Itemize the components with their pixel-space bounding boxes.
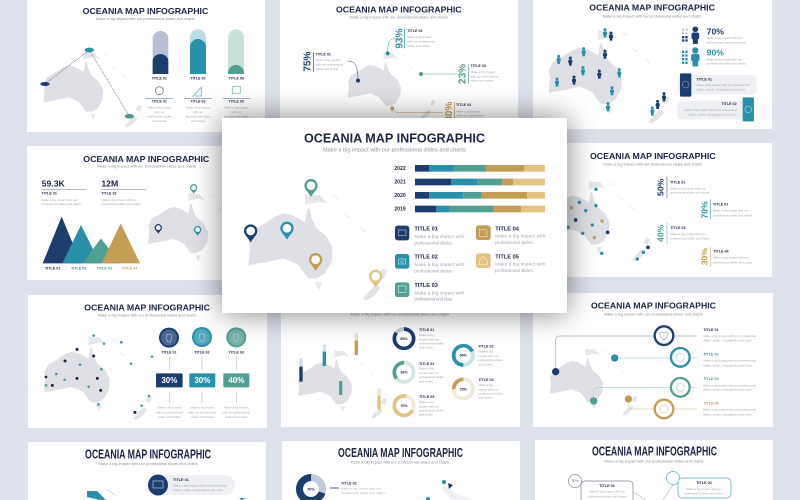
panel: top middle slide: TITLE 01 <box>316 52 331 56</box>
panel: top left slide <box>27 0 265 132</box>
panel: lower right slide <box>533 293 773 427</box>
panel: bottom middle slide: professional slides and charts <box>341 491 386 495</box>
panel: lower middle slide: 85% <box>400 337 408 341</box>
panel: lower right slide: OCEANIA MAP INFOGRAPHIC <box>591 301 717 311</box>
panel: top right slide: Make a big impact with our professional slides and charts <box>603 14 701 18</box>
stacked bar chart <box>394 165 545 213</box>
legend item: title 02: Make a big impact with <box>414 262 465 267</box>
panel: top left slide: TITLE 03 <box>229 77 244 81</box>
panel: middle left slide: 12M <box>101 179 118 189</box>
panel: lower left slide: 30% <box>194 376 210 385</box>
panel: lower left slide: with our professional <box>156 410 183 414</box>
panel: middle left slide: Make a big impact with our professional slides and charts <box>97 165 196 169</box>
panel: top left slide: professional slides <box>186 115 211 119</box>
panel: lower middle slide: Make a big <box>478 350 493 354</box>
legend item: title 04: TITLE 04 <box>495 226 520 232</box>
panel: top left slide: with our <box>231 110 242 114</box>
panel: lower left slide: Make a big impact <box>157 406 182 410</box>
panel: lower middle slide: and charts <box>419 379 433 383</box>
panel: lower middle slide: and charts <box>419 346 433 350</box>
panel: lower middle slide: impact with our <box>419 371 439 375</box>
panel: top middle slide: TITLE 02 <box>407 29 423 33</box>
panel: middle left slide: TITLE 03 <box>97 266 112 270</box>
panel: middle right slide: 30% <box>700 248 710 265</box>
subtitle: Make a big impact with our professional slides and charts <box>323 147 466 153</box>
panel: bottom middle slide: Make a big impact with our <box>341 486 381 490</box>
panel: top left slide: and charts <box>152 119 167 123</box>
panel: top right slide <box>533 0 772 129</box>
panel: top right slide: slides, charts, infographics and more <box>688 113 737 117</box>
panel: top middle slide: OCEANIA MAP INFOGRAPHIC <box>336 5 462 15</box>
panel: lower left slide: OCEANIA MAP INFOGRAPHIC <box>84 302 211 312</box>
panel: lower middle slide: professional slides <box>478 358 503 362</box>
panel: lower left slide: Make a big impact with our professional slides and charts <box>98 313 196 317</box>
stacked bar chart: 2020 <box>394 193 406 199</box>
panel: middle right slide: professional slides and charts <box>713 260 753 264</box>
panel: top middle slide: slides and charts <box>407 44 430 48</box>
panel: top middle slide: 23% <box>458 64 469 84</box>
panel: middle right slide: Make a big impact with our <box>713 209 748 213</box>
panel: lower left slide: TITLE 01 <box>161 350 177 354</box>
panel: lower middle slide: TITLE 03 <box>419 362 434 366</box>
panel: lower middle slide: professional slides <box>419 375 444 379</box>
panel: bottom left slide <box>28 442 266 500</box>
panel: lower right slide: Make a big impact with our professional slides and charts <box>604 312 703 316</box>
panel: lower left slide: TITLE 03 <box>229 350 244 354</box>
panel: lower right slide: slides, charts, infographics and more <box>703 363 752 367</box>
legend item: title 03 <box>395 282 465 302</box>
panel: middle left slide: TITLE 02 <box>101 191 117 195</box>
panel: top left slide: Make a big impact <box>186 106 210 110</box>
panel: top right slide: TITLE 01 <box>697 77 712 81</box>
panel: middle left slide <box>27 146 265 280</box>
panel: middle left slide: professional slides and charts <box>101 202 141 206</box>
legend item: title 02: TITLE 02 <box>414 255 438 261</box>
panel: lower left slide: Make a big impact <box>190 406 215 410</box>
legend item: title 02: professional slides. <box>414 268 453 273</box>
panel: top middle slide: TITLE 04 <box>456 103 472 107</box>
panel: top left slide: Make a big impact with our professional slides and charts <box>96 17 195 21</box>
panel: top middle slide: with our professional <box>316 62 343 66</box>
panel: top left slide: TITLE 02 <box>190 77 206 81</box>
panel: middle right slide: TITLE 01 <box>670 180 685 184</box>
panel: middle right slide: professional slides and charts <box>670 237 710 241</box>
panel: top right slide: Make a big impact with our professional <box>684 108 737 112</box>
panel: middle left slide: TITLE 04 <box>122 266 138 270</box>
panel: middle right slide <box>500 143 772 277</box>
panel: lower right slide: Make a big impact with our professional <box>703 383 756 387</box>
panel: top left slide: with our <box>193 110 203 114</box>
panel: top left slide: TITLE 01 <box>152 99 167 103</box>
panel: lower left slide: slides and charts <box>158 415 181 419</box>
panel: top left slide: and charts <box>191 119 205 123</box>
panel: lower left slide <box>28 295 267 428</box>
panel: middle left slide: TITLE 02 <box>71 266 86 270</box>
panel: middle right slide: professional slides and charts <box>670 190 710 194</box>
panel: lower middle slide: 36% <box>400 371 408 375</box>
legend item: title 04: Make a big impact with <box>495 234 546 239</box>
map of Oceania with pins <box>244 179 387 300</box>
panel: lower middle slide: TITLE 02 <box>478 345 494 349</box>
panel: lower middle slide: Make a big impact with our professional slides and charts <box>351 312 449 316</box>
panel: lower middle slide: and charts <box>419 413 433 417</box>
panel: bottom middle slide: OCEANIA MAP INFOGRAPHIC <box>338 445 463 460</box>
panel: central slide <box>222 118 567 313</box>
panel: lower middle slide: Make a big <box>419 367 434 371</box>
panel: lower right slide: TITLE 01 <box>703 328 719 332</box>
panel: middle left slide: OCEANIA MAP INFOGRAPHIC <box>83 154 210 164</box>
panel: lower middle slide <box>281 290 520 427</box>
panel: bottom right slide: Make a big impact with our professional slides and charts <box>604 460 704 464</box>
panel: top middle slide <box>280 0 518 125</box>
legend item: title 01: Make a big impact with <box>414 234 465 239</box>
panel: lower middle slide: Make a big <box>419 333 434 337</box>
panel: top right slide: Make a big impact with our professional <box>697 83 749 87</box>
panel: bottom middle slide <box>282 441 520 500</box>
panel: middle left slide: Make a big impact with our <box>42 198 77 202</box>
panel: bottom right slide: TITLE 01 <box>599 484 615 488</box>
panel: top left slide: professional slides <box>224 115 249 119</box>
panel: middle right slide: TITLE 04 <box>713 250 730 254</box>
panel: top middle slide: Make a big impact <box>407 35 432 39</box>
panel: lower middle slide: professional slides <box>419 341 444 345</box>
legend item: title 03: TITLE 03 <box>414 283 438 289</box>
panel: top right slide: TITLE 02 <box>721 102 737 106</box>
panel: top middle slide: Make a big impact <box>471 70 495 74</box>
panel: middle right slide: 40% <box>656 224 666 242</box>
panel: middle right slide: Make a big impact with our <box>713 256 749 260</box>
panel: top middle slide: slides and charts <box>316 67 339 71</box>
panel: top middle slide: Make a big impact <box>316 58 340 62</box>
legend item: title 01: professional slides. <box>414 240 453 245</box>
panel: lower middle slide: impact with our <box>478 354 498 358</box>
panel: lower middle slide: and charts <box>478 362 493 366</box>
panel: lower right slide: Make a big impact with our professional <box>703 359 756 363</box>
panel: lower right slide: Make a big impact with our professional <box>703 334 756 338</box>
panel: bottom right slide: Make a big impact with our <box>686 487 722 491</box>
panel: lower right slide: Make a big impact with our professional <box>703 408 756 412</box>
legend item: title 04 <box>476 225 546 245</box>
legend item: title 03: professional and clear. <box>414 297 453 302</box>
legend item: title 03: Make a big impact with <box>414 290 465 295</box>
panel: top left slide: Make a big impact <box>147 106 172 110</box>
legend item: title 05: professional slides. <box>495 268 534 273</box>
panel: lower left slide: slides and charts <box>191 415 214 419</box>
panel: middle left slide: Make a big impact with our <box>101 198 137 202</box>
panel: bottom left slide: OCEANIA MAP INFOGRAPHIC <box>85 446 211 462</box>
panel: bottom right slide: OCEANIA MAP INFOGRAPHIC <box>592 444 717 458</box>
legend item: title 05: TITLE 05 <box>495 254 519 260</box>
panel: top right slide: Make a big impact with our <box>707 36 742 40</box>
panel: top left slide: professional slides <box>147 115 172 119</box>
panel: bottom middle slide: Make a big impact with our professional slides and charts <box>350 460 450 464</box>
legend item: title 01 <box>395 226 465 245</box>
panel: lower middle slide: impact with our <box>419 337 439 341</box>
stacked bar chart: 2022 <box>394 166 406 172</box>
panel: top left slide: TITLE 03 <box>229 99 244 103</box>
panel: top left slide: with our <box>154 110 165 114</box>
panel: lower left slide: 40% <box>228 376 244 385</box>
panel: top middle slide: 75% <box>303 52 314 72</box>
panel: middle right slide: TITLE 03 <box>670 226 686 230</box>
panel: lower left slide: slides and charts <box>225 415 248 419</box>
panel: top right slide: 70% <box>707 26 724 36</box>
panel: lower left slide: TITLE 02 <box>194 350 210 354</box>
panel: top left slide: OCEANIA MAP INFOGRAPHIC <box>83 6 209 16</box>
panel: lower right slide: slides, charts, infographics and more <box>703 388 752 392</box>
panel: top middle slide: slides and charts <box>471 79 494 83</box>
panel: lower middle slide: professional slides <box>419 408 444 412</box>
panel: top middle slide: with our professional <box>471 74 498 78</box>
panel: lower left slide: Make a big impact <box>224 406 249 410</box>
panel: top right slide: professional slides and charts <box>707 62 746 66</box>
panel: bottom left slide: TITLE 01 <box>173 478 189 482</box>
panel: middle right slide: Make a big impact with our <box>670 232 706 236</box>
panel: lower right slide: TITLE 02 <box>703 353 719 357</box>
panel: top right slide: OCEANIA MAP INFOGRAPHIC <box>589 3 716 13</box>
panel: middle right slide: Make a big impact with our <box>670 186 705 190</box>
panel: top right slide: professional slides and charts <box>707 40 746 44</box>
panel: lower middle slide: Make a big <box>478 383 493 387</box>
panel: top right slide: 90% <box>707 48 724 58</box>
panel: top middle slide: TITLE 03 <box>471 64 486 68</box>
panel: lower middle slide: impact with our <box>478 387 498 391</box>
panel: bottom left slide: Make a big impact with our professional slides and charts <box>98 462 198 466</box>
panel: lower right slide: TITLE 04 <box>703 402 720 406</box>
panel: lower left slide: 30% <box>161 376 177 385</box>
panel: bottom middle slide: TITLE 01 <box>341 482 357 486</box>
panel: top left slide: TITLE 01 <box>152 77 167 81</box>
title: OCEANIA MAP INFOGRAPHIC <box>304 131 486 146</box>
panel: bottom left slide: Make a big impact with our professional <box>173 484 227 488</box>
panel: middle right slide: professional slides and charts <box>713 213 753 217</box>
panel: top right slide: slides, charts, infographics and more <box>697 88 746 92</box>
panel: middle left slide: 59.3K <box>42 179 66 189</box>
panel: lower middle slide: TITLE 05 <box>419 395 434 399</box>
panel: top left slide: Make a big impact <box>224 106 249 110</box>
stacked bar chart: 2019 <box>394 207 406 213</box>
panel: lower middle slide: 25% <box>460 387 468 391</box>
panel: bottom right slide <box>535 440 773 500</box>
legend item: title 02 <box>395 254 465 273</box>
legend item: title 05: Make a big impact with <box>495 262 546 267</box>
panel: top middle slide: 30% <box>444 102 455 122</box>
panel: lower middle slide: and charts <box>478 396 493 400</box>
panel: top right slide: Make a big impact with our <box>707 57 742 61</box>
panel: lower middle slide: professional slides <box>478 391 503 395</box>
panel: bottom right slide: professional slides and charts <box>684 492 724 496</box>
panel: lower middle slide: impact with our <box>419 404 439 408</box>
stacked bar chart: 2021 <box>394 180 406 186</box>
panel: middle right slide: Make a big impact with our professional slides and charts <box>603 162 702 166</box>
panel: bottom right slide: Make a big impact with our <box>589 490 625 494</box>
panel: lower middle slide: Make a big <box>419 400 434 404</box>
panel: lower left slide: with our professional <box>223 410 250 414</box>
panel: middle left slide: TITLE 01 <box>45 266 60 270</box>
panel: bottom right slide: 30% <box>572 479 578 483</box>
panel: lower right slide: TITLE 03 <box>703 377 719 381</box>
panel: middle right slide: OCEANIA MAP INFOGRAPHIC <box>590 151 716 161</box>
panel: lower middle slide: 70% <box>400 404 408 408</box>
panel: top left slide: TITLE 02 <box>190 99 206 103</box>
panel: lower middle slide: TITLE 01 <box>419 328 434 332</box>
legend item: title 04: professional slides. <box>495 240 534 245</box>
panel: bottom left slide: slides, charts, infographics and more <box>173 488 223 492</box>
panel: bottom right slide: TITLE 02 <box>696 481 712 485</box>
panel: lower right slide: slides, charts, infographics and more <box>703 412 752 416</box>
legend item: title 05 <box>476 253 546 273</box>
panel: middle left slide: TITLE 01 <box>42 191 57 195</box>
panel: lower middle slide: 68% <box>460 354 468 358</box>
panel: middle left slide: professional slides and charts <box>42 202 81 206</box>
panel: middle right slide: TITLE 02 <box>713 203 728 207</box>
panel: middle right slide: 70% <box>700 201 710 219</box>
panel: top middle slide: with our professional <box>407 39 435 43</box>
legend item: title 01: TITLE 01 <box>414 227 438 233</box>
panel: lower left slide: with our professional <box>189 410 216 414</box>
panel: middle right slide: 50% <box>656 178 666 196</box>
panel: top middle slide: 93% <box>394 29 405 49</box>
shadow of central slide <box>222 118 567 313</box>
panel: bottom right slide: professional slides and charts <box>587 494 627 498</box>
panel: bottom middle slide: 70% <box>307 488 315 492</box>
panel: top middle slide: Make a big impact with our professional slides and charts <box>349 15 448 19</box>
panel: lower middle slide: TITLE 04 <box>478 378 495 382</box>
panel: top middle slide: with our professional <box>456 114 484 118</box>
panel: top middle slide: Make a big impact <box>456 109 480 113</box>
panel: lower right slide: slides, charts, infographics and more <box>703 339 752 343</box>
